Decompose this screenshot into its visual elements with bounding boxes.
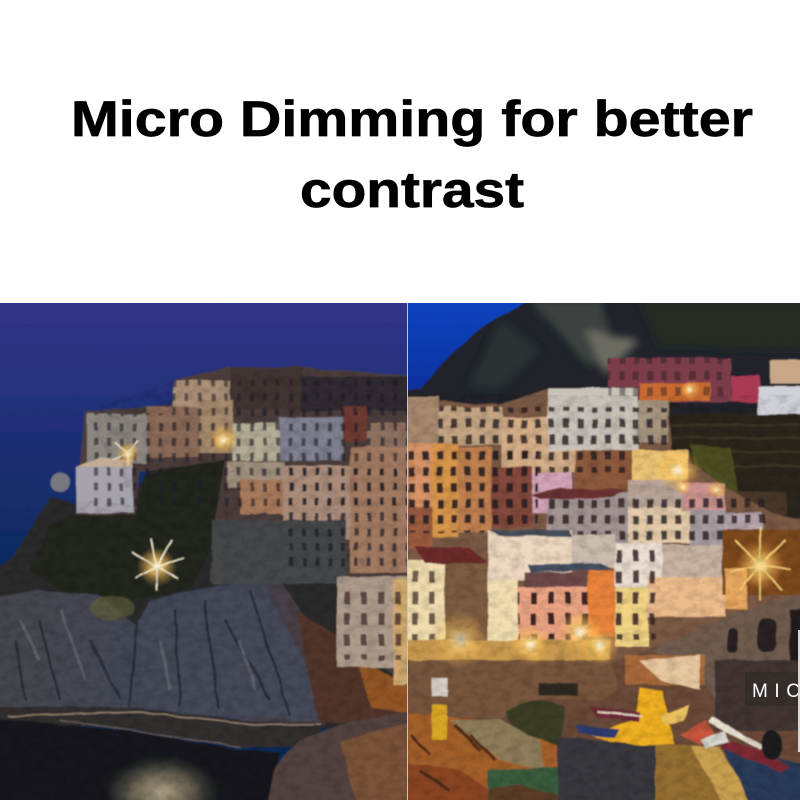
icon: street light stars, left bbox=[50, 424, 239, 590]
dark water with reflected glow, left bbox=[0, 717, 280, 800]
middle row of houses, right bbox=[385, 443, 768, 551]
blue evening sky, right bbox=[408, 303, 526, 392]
night sky, left bbox=[0, 303, 407, 762]
title: contrast bbox=[300, 162, 524, 218]
moored boats, right bbox=[575, 655, 790, 772]
stone bridge, right bbox=[385, 660, 618, 745]
hillside and dark terraces, right bbox=[408, 303, 800, 520]
village backing mass, right bbox=[385, 388, 800, 665]
foreground rocks, left bbox=[267, 712, 407, 800]
waterfront houses, right bbox=[385, 530, 800, 662]
watermark label MIC: MIC bbox=[752, 681, 800, 702]
watermark label MIC bbox=[745, 630, 800, 752]
hillside village buildings, left bbox=[75, 367, 430, 700]
icon: street light stars and glow, right bbox=[430, 380, 790, 670]
title bbox=[71, 91, 753, 218]
divider line between the halves bbox=[407, 303, 408, 800]
seaside path, left bbox=[0, 706, 320, 748]
rocky headland, left bbox=[0, 452, 430, 730]
panel: dimmed left half of the photo, without micro dimming bbox=[0, 285, 430, 800]
stone viaduct and arches, right bbox=[625, 586, 800, 730]
upper row of houses, right bbox=[385, 358, 800, 490]
photo grain texture on rocks and buildings bbox=[0, 369, 800, 800]
title: Micro Dimming for better bbox=[71, 91, 753, 147]
panel: bright right half of the photo, with micro dimming bbox=[385, 285, 800, 800]
orange rocks, right bbox=[408, 704, 559, 800]
harbour slipway, right bbox=[558, 688, 800, 800]
